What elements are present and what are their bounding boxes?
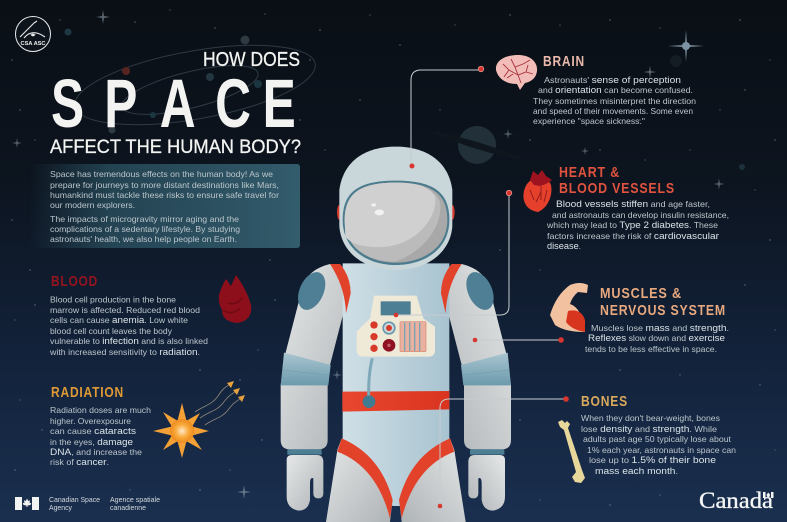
icon: radiating sun <box>153 381 245 458</box>
connector: bones <box>438 396 569 508</box>
arm: right <box>441 264 511 511</box>
logo: Canadian Space Agency signature: Canadian Space <box>49 495 100 504</box>
panel: radiation: in the eyes, damage <box>50 437 133 448</box>
helmet <box>337 147 455 270</box>
panel: bones: lose up to 1.5% of their bone <box>589 455 716 466</box>
panel: introduction: complications of a sedentary lifestyle. By studying <box>50 224 240 234</box>
panel: radiation <box>50 384 151 468</box>
panel: introduction: humankind must tackle these risks to ensure safe travel for <box>50 190 279 200</box>
panel: muscles and nervous system: Muscles lose mass and strength. <box>591 323 729 334</box>
title: HOW DOES <box>203 49 300 71</box>
logo: Canadian Space Agency signature: canadienne <box>110 503 146 512</box>
logo: Canada wordmark: Canada <box>699 488 773 513</box>
panel: brain: Astronauts' sense of perception <box>544 75 681 86</box>
panel: introduction: astronauts' health, we also help people on Earth. <box>50 234 237 244</box>
connector: heart <box>394 190 512 317</box>
panel: radiation: higher. Overexposure <box>50 416 131 426</box>
icon: saturn planet <box>434 126 520 164</box>
panel: heart and blood vessels: BLOOD VESSELS <box>559 180 675 197</box>
chest control pack <box>357 296 435 357</box>
logo: Canadian Space Agency signature: Agence spatiale <box>110 495 160 504</box>
leg: left <box>326 438 393 522</box>
icon: CSA ASC logo: CSA ASC <box>20 41 46 47</box>
panel: bones: lose density and strength . While <box>581 424 717 435</box>
panel: bones: adults past age 50 typically lose about <box>583 434 732 444</box>
logo: Canadian Space Agency signature: Agency <box>49 503 72 512</box>
panel: heart and blood vessels: Blood vessels stiffen and age faster, <box>556 199 710 210</box>
panel: radiation: risk of cancer. <box>50 457 109 468</box>
connector: brain <box>410 66 484 168</box>
astronaut <box>281 147 511 522</box>
panel: muscles and nervous system <box>585 285 729 354</box>
panel: muscles and nervous system: Reflexes slow down and exercise <box>588 333 725 344</box>
orbit lines behind title <box>69 30 321 140</box>
panel: blood <box>49 273 208 358</box>
panel: muscles and nervous system: NERVOUS SYSTEM <box>600 302 726 319</box>
connector: muscles <box>473 337 564 343</box>
hose <box>363 358 375 408</box>
panel: blood: Blood cell production in the bone <box>50 294 176 304</box>
panel: introduction <box>28 164 300 248</box>
panel: heart and blood vessels: factors increase the risk of cardiovascular <box>547 231 720 242</box>
panel: heart and blood vessels: and astronauts can develop insulin resistance, <box>552 210 729 220</box>
panel: brain <box>533 54 696 126</box>
arm: left <box>281 264 351 511</box>
panel: bones: BONES <box>581 393 628 410</box>
panel: brain: and orientation can become confused. <box>538 85 693 96</box>
icon: CSA ASC logo <box>16 16 50 52</box>
leg: right <box>399 438 466 522</box>
panel: introduction: The impacts of microgravity mirror aging and the <box>50 214 239 224</box>
icon: flexed arm <box>550 283 588 332</box>
logo: Canadian Space Agency signature <box>15 495 160 512</box>
panel: heart and blood vessels <box>546 164 729 252</box>
belt <box>342 391 449 412</box>
panel: bones <box>581 393 736 477</box>
icon: bone <box>558 420 585 483</box>
panel: introduction: prepare for journeys to more distant destinations like Mars, <box>50 180 279 190</box>
panel: heart and blood vessels: HEART & <box>559 164 620 181</box>
panel: bones: mass each month . <box>595 466 678 477</box>
title <box>50 49 301 158</box>
panel: muscles and nervous system: MUSCLES & <box>600 285 682 302</box>
panel: brain: They sometimes misinterpret the direction <box>533 96 696 106</box>
panel: blood: marrow is affected. Reduced red blood <box>50 305 200 315</box>
panel: brain: and speed of their movements. Some even <box>533 106 693 116</box>
sparkle: bright star <box>668 30 704 62</box>
panel: blood: blood cell count leaves the body <box>50 326 173 336</box>
panel: blood: BLOOD <box>51 273 98 290</box>
icon: blood drops <box>219 275 251 323</box>
panel: radiation: can cause cataracts <box>50 426 136 437</box>
panel: heart and blood vessels: which may lead to Type 2 diabetes. These <box>546 220 718 231</box>
panel: blood: vulnerable to infection and is also linked <box>50 336 208 347</box>
panel: introduction: our modern explorers. <box>50 200 135 210</box>
title: SPACE <box>51 65 296 142</box>
panel: brain: BRAIN <box>543 54 585 70</box>
panel: bones: When they don't bear-weight, bones <box>581 413 720 423</box>
panel: introduction: Space has tremendous effects on the human body! As we <box>50 169 273 179</box>
panel: radiation: Radiation doses are much <box>50 405 151 415</box>
panel: blood: with increased sensitivity to radiation. <box>49 347 200 358</box>
panel: radiation: DNA, and increase the <box>50 447 142 458</box>
icon: heart <box>523 170 552 212</box>
shoulder stripes <box>330 264 462 313</box>
panel: brain: experience "space sickness." <box>533 116 645 126</box>
icon: brain <box>496 55 537 90</box>
panel: bones: 1% each year, astronauts in space can <box>587 445 736 455</box>
torso <box>343 263 449 506</box>
panel: heart and blood vessels: disease. <box>547 241 581 252</box>
panel: radiation: RADIATION <box>51 384 124 401</box>
panel: muscles and nervous system: tends to be less effective in space. <box>585 344 717 354</box>
title: AFFECT THE HUMAN BODY? <box>50 137 301 158</box>
panel: blood: cells can cause anemia. Low white <box>50 315 188 326</box>
